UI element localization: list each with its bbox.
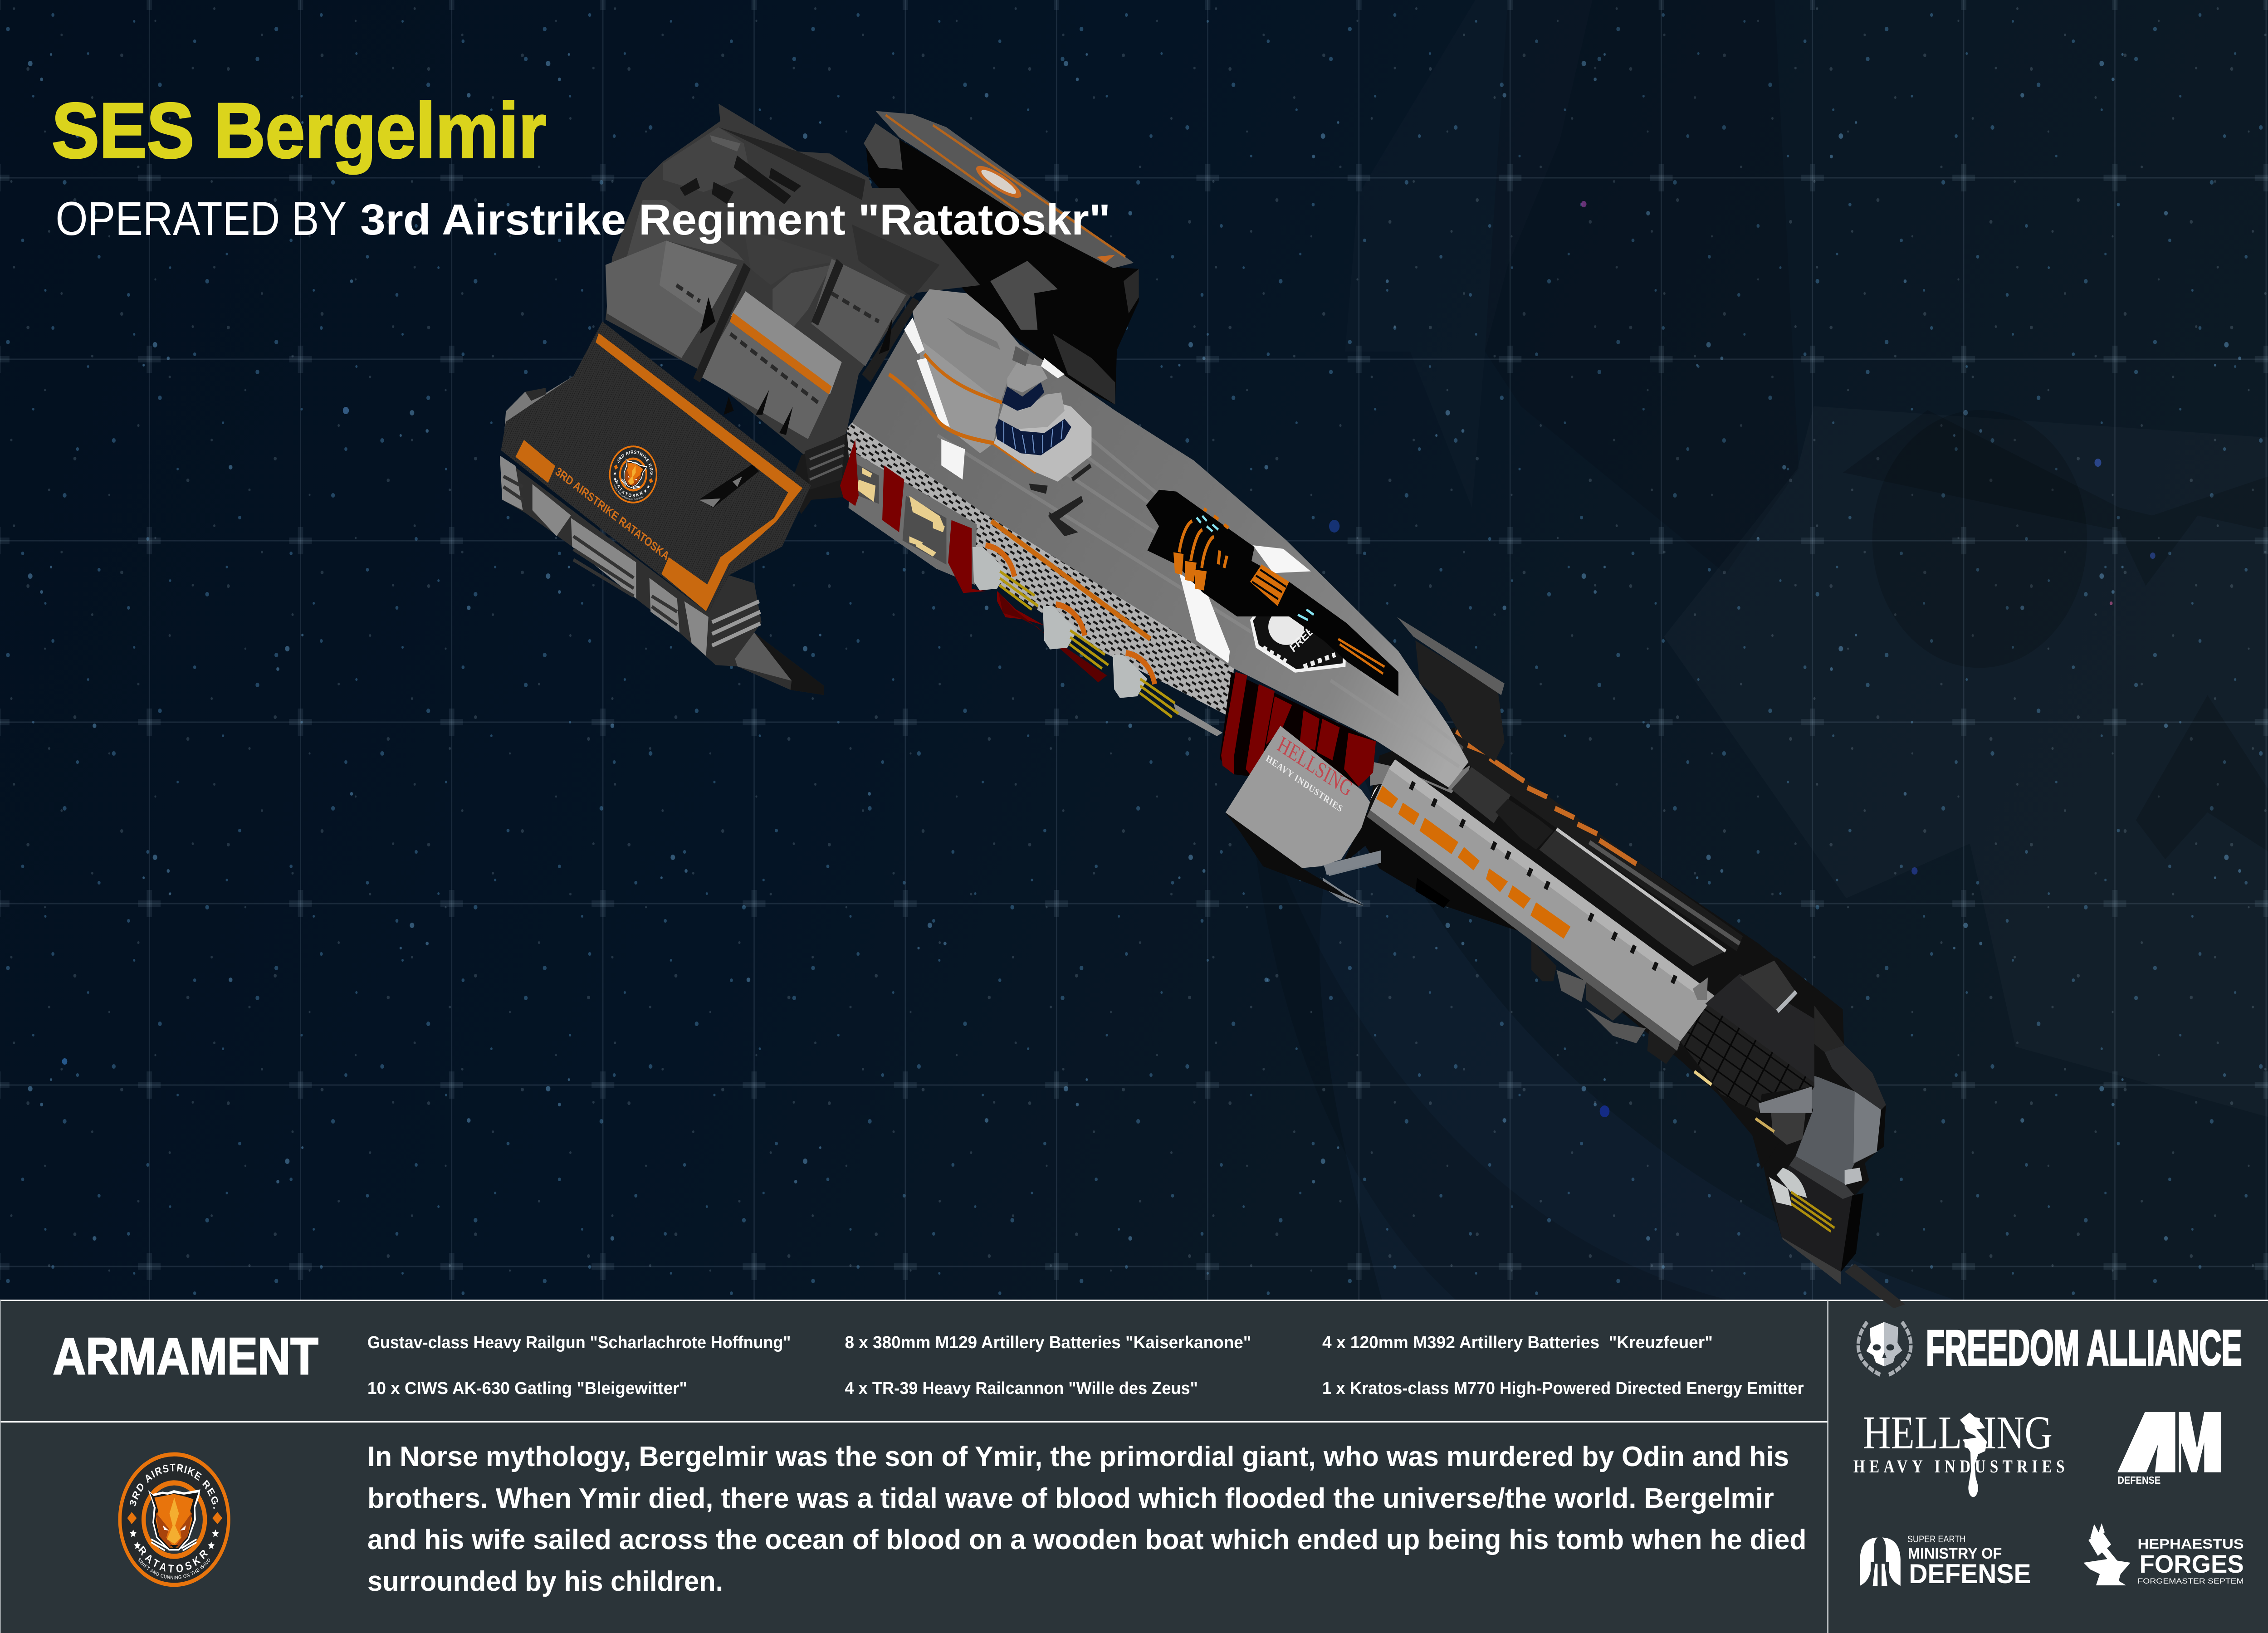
armament heading: ARMAMENT (53, 1328, 318, 1385)
description text: In Norse mythology, Bergelmir was the son of Ymir, the primordial giant, who was murdered by Odin and his (367, 1441, 1789, 1472)
ship: command dome and stripes (889, 289, 1036, 479)
ship: main hull deck (852, 327, 1469, 787)
title: SES Bergelmir (52, 87, 546, 174)
Heavy Industries wordmark: HEAVY INDUSTRIES (1853, 1456, 2065, 1477)
icon: Ratatoskr regiment emblem: SWIFT AND CUNNING ON THE WIND (137, 1557, 212, 1581)
ship: flight deck emblem (603, 438, 664, 511)
grid overlay (0, 0, 2268, 1301)
Super Earth label: SUPER EARTH (1907, 1535, 1965, 1545)
ship: dorsal fin (1397, 617, 1505, 762)
greeble pack under flight deck (500, 455, 824, 695)
armament list: 10 x CIWS AK-630 Gatling "Bleigewitter" (367, 1379, 687, 1398)
icon: AM mark (2117, 1412, 2221, 1472)
icon: Ratatoskr regiment emblem: RATATOSKR (137, 1544, 210, 1575)
icon: Freedom Alliance skull (1858, 1322, 1911, 1375)
logo: AM Defense (2117, 1412, 2221, 1486)
ship: three side turrets (973, 545, 1178, 717)
regiment name: 3rd Airstrike Regiment "Ratatoskr" (360, 195, 1110, 244)
icon: hammer and anvil (2083, 1523, 2131, 1585)
operated by label: OPERATED BY (56, 193, 347, 245)
Hellsing wordmark: HELLSING (1863, 1407, 2053, 1459)
ship: stern keel antenna (1845, 1264, 1905, 1308)
logo: Freedom Alliance (1858, 1320, 2242, 1376)
ship: underside pods (1531, 940, 1680, 1064)
ship: hull orange stripe and under-bay (991, 521, 1222, 736)
icon: Ratatoskr regiment emblem (118, 1452, 230, 1587)
ship: Freedom Alliance hull decal: FREE (1288, 623, 1316, 655)
ship: Freedom Alliance hull decal (1250, 597, 1347, 673)
icon: dragon drop (1960, 1413, 1987, 1497)
ship: stern section (1739, 957, 1905, 1308)
armament list: Gustav-class Heavy Railgun "Scharlachrote Hoffnung" (367, 1333, 791, 1352)
armament list (367, 1333, 1804, 1398)
description text (367, 1441, 1807, 1597)
Forgemaster Septem label: FORGEMASTER SEPTEM (2138, 1577, 2244, 1585)
ship: textured dorsal panel (1539, 829, 1725, 966)
armament list: 1 x Kratos-class M770 High-Powered Directed Energy Emitter (1322, 1379, 1804, 1398)
ship: bridge tower (994, 346, 1091, 536)
ship: rear fuselage (1323, 728, 1814, 1169)
ship: heavy railgun (1146, 490, 1398, 696)
Forges label: FORGES (2140, 1550, 2244, 1578)
watermark: faint skull emblem (1345, 0, 2268, 1117)
Defense label: DEFENSE (1909, 1559, 2031, 1589)
Hephaestus label: HEPHAESTUS (2138, 1536, 2244, 1552)
turret 3 (1113, 653, 1178, 717)
plate label: Hellsing: HELLSING (1274, 732, 1356, 802)
ship: top rail with orange dashes (1455, 728, 1743, 951)
ship: flight deck (500, 322, 824, 695)
description text: and his wife sailed across the ocean of blood on a wooden boat which ended up being his tomb when he died (367, 1524, 1807, 1555)
icon: Ratatoskr regiment emblem: 3RD AIRSTRIKE REG. (127, 1462, 222, 1510)
panel: footer background (0, 1300, 2268, 1633)
ship: light gray beam (1367, 759, 1718, 1051)
armament list: 4 x 120mm M392 Artillery Batteries "Kreuzfeuer" (1322, 1333, 1713, 1352)
ship: upper starboard wing (864, 111, 1139, 405)
turret 2 (1043, 604, 1109, 669)
ship: flight deck lettering: 3RD AIRSTRIKE RATATOSKA (553, 465, 671, 563)
ship: red heat fins (1220, 672, 1376, 787)
Ministry of label: MINISTRY OF (1908, 1545, 2002, 1562)
ship: ribbed stern bay (1680, 961, 1814, 1145)
ship: Hellsing plate (1226, 726, 1380, 906)
description text: surrounded by his children. (367, 1566, 723, 1597)
turret 1 (973, 545, 1038, 610)
description text: brothers. When Ymir died, there was a tidal wave of blood which flooded the universe/the world. Bergelmir (367, 1483, 1774, 1514)
ship: stern turret (1769, 1168, 1834, 1232)
plate label: Heavy Industries: HEAVY INDUSTRIES (1264, 753, 1344, 814)
AM Defense label: DEFENSE (2117, 1475, 2160, 1486)
subtitle (56, 193, 1110, 245)
logo: Hellsing Heavy Industries (1853, 1407, 2065, 1497)
logo: Hephaestus Forges (2083, 1523, 2244, 1585)
ship: SES Bergelmir (500, 104, 1905, 1308)
armament list: 4 x TR-39 Heavy Railcannon "Wille des Zeus" (845, 1379, 1198, 1398)
armament list: 8 x 380mm M129 Artillery Batteries "Kaiserkanone" (845, 1333, 1251, 1352)
ship: rear engine block (606, 104, 980, 514)
ship: hull side bays and red bands (840, 439, 1044, 626)
icon: ministry emblem (1860, 1537, 1901, 1586)
ship: side hull plating (847, 423, 1234, 715)
ship: white deck stripes (1179, 545, 1311, 663)
ship: deck plank streaks (938, 390, 1463, 767)
logo: Super Earth Ministry of Defense (1860, 1535, 2031, 1589)
